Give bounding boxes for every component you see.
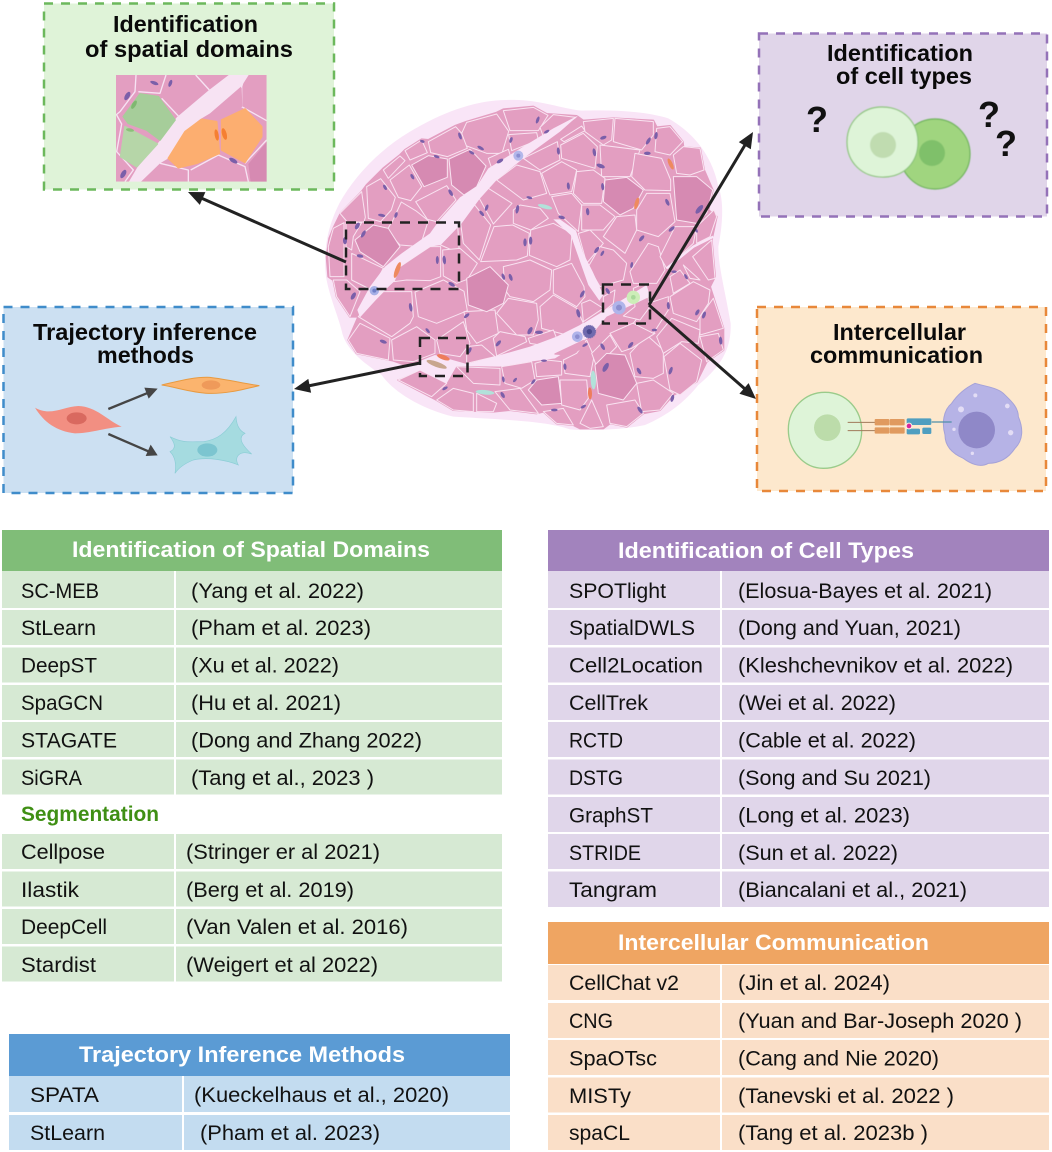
- row: DeepCell: DeepCell: [21, 916, 107, 939]
- row: Tangram: [548, 872, 1049, 907]
- row: DeepST: DeepST: [21, 654, 97, 678]
- row: StLearn: StLearn: [21, 617, 96, 640]
- table header: spatial domains: [2, 530, 502, 571]
- row: Ilastik: [2, 872, 502, 906]
- row: CellChat v2: [548, 965, 1049, 1000]
- row: STAGATE: STAGATE: [21, 730, 117, 752]
- row: SiGRA: [2, 760, 502, 794]
- row: Cell2Location: [548, 648, 1049, 682]
- row: SiGRA: (Tang et al., 2023 ): [191, 767, 374, 790]
- icon: question marks: ?: [978, 94, 1000, 135]
- heading: cell types: Identification: [827, 40, 973, 66]
- row: SPATA: (Kueckelhaus et al., 2020): [194, 1084, 449, 1107]
- row: Cellpose: [2, 834, 502, 869]
- row: Cell2Location: Cell2Location: [569, 654, 703, 678]
- row: MISTy: (Tanevski et al. 2022 ): [738, 1085, 954, 1108]
- pale connective tissue channels: [357, 115, 713, 383]
- table header: cell types: [548, 530, 1049, 571]
- table: identification of spatial domains: [2, 530, 502, 982]
- row: CNG: (Yuan and Bar-Joseph 2020 ): [738, 1010, 1022, 1033]
- row: spaCL: spaCL: [569, 1122, 630, 1145]
- icon: question marks: ?: [995, 123, 1017, 164]
- row: StLearn: [2, 610, 502, 645]
- row: SPOTlight: (Elosua-Bayes et al. 2021): [738, 580, 992, 603]
- row: SPOTlight: [548, 571, 1049, 608]
- row: SpaOTsc: (Cang and Nie 2020): [738, 1048, 939, 1070]
- table header: cell types: Identification of Cell Types: [618, 538, 914, 563]
- row: STAGATE: (Dong and Zhang 2022): [191, 730, 422, 752]
- row: DeepCell: [2, 909, 502, 944]
- row: CNG: [548, 1003, 1049, 1038]
- row: CellChat v2: CellChat v2: [569, 972, 679, 995]
- row: STAGATE: [2, 722, 502, 757]
- table header: intercellular communication: [548, 922, 1049, 964]
- row: SC-MEB: SC-MEB: [21, 580, 99, 603]
- arrow to spatial domains panel: [188, 192, 346, 262]
- table header: spatial domains: Identification of Spatial Domains: [72, 537, 430, 562]
- row: SPOTlight: SPOTlight: [569, 580, 666, 603]
- dashed zoom box: cell types region: [603, 284, 650, 324]
- cell nuclei: [343, 116, 723, 414]
- arrow to intercellular communication panel: [649, 305, 756, 399]
- immune and stromal cells in tissue: [370, 151, 675, 399]
- row: SpatialDWLS: [548, 610, 1049, 645]
- heading: spatial domains: of spatial domains: [85, 36, 293, 62]
- heading: trajectory inference: Trajectory inference: [33, 319, 257, 345]
- row: spaCL: (Tang et al. 2023b ): [738, 1122, 928, 1145]
- row: SpaOTsc: SpaOTsc: [569, 1048, 657, 1070]
- subheading: segmentation: Segmentation: [21, 803, 159, 826]
- icon: two green cells: [847, 107, 970, 189]
- table: trajectory inference methods: [9, 1034, 510, 1150]
- row: Stardist: Stardist: [21, 954, 96, 977]
- row: DSTG: DSTG: [569, 767, 623, 790]
- icon: question marks: ?: [806, 99, 828, 140]
- heading: intercellular communication: Intercellular: [833, 319, 966, 345]
- arrow to cell types panel: [649, 132, 753, 305]
- central tissue cross-section: [325, 100, 731, 430]
- row: Cellpose: Cellpose: [21, 841, 105, 864]
- row: SPATA: SPATA: [30, 1084, 99, 1107]
- icon: ligand receptor interaction between cells: [788, 383, 1022, 468]
- row: SpaGCN: (Hu et al. 2021): [191, 692, 341, 715]
- panel: identification of cell types: [759, 34, 1047, 216]
- row: StLearn: StLearn: [30, 1122, 105, 1145]
- row: Tangram: (Biancalani et al., 2021): [738, 879, 967, 902]
- panel: identification of spatial domains: [44, 4, 334, 190]
- row: GraphST: GraphST: [569, 804, 653, 828]
- row: SpaGCN: [2, 685, 502, 720]
- heading: intercellular communication: communication: [810, 342, 983, 368]
- row: Stardist: [2, 946, 502, 982]
- row: SC-MEB: [2, 571, 502, 608]
- table: identification of cell types: [548, 530, 1049, 907]
- row: Cell2Location: (Kleshchevnikov et al. 2022): [738, 654, 1013, 678]
- panel: intercellular communication: [757, 307, 1046, 491]
- row: DeepST: [2, 648, 502, 682]
- row: CellTrek: CellTrek: [569, 692, 649, 715]
- row: DSTG: (Song and Su 2021): [738, 767, 931, 790]
- row: RCTD: RCTD: [569, 730, 623, 752]
- icon: cell differentiation trajectories: [35, 377, 259, 473]
- row: RCTD: (Cable et al. 2022): [738, 730, 916, 752]
- row: Cellpose: (Stringer er al 2021): [186, 841, 380, 864]
- icon: question marks: [806, 94, 1017, 164]
- row: StLearn: (Pham et al. 2023): [191, 617, 371, 640]
- dashed zoom box: spatial domain region: [346, 222, 459, 289]
- heading: trajectory inference: methods: [97, 342, 194, 368]
- row: Stardist: (Weigert et al 2022): [186, 954, 378, 977]
- row: Ilastik: Ilastik: [21, 879, 80, 902]
- row: DSTG: [548, 760, 1049, 794]
- row: CellTrek: [548, 685, 1049, 720]
- row: SC-MEB: (Yang et al. 2022): [191, 580, 364, 603]
- row: SpaOTsc: [548, 1040, 1049, 1075]
- table: intercellular communication: [548, 922, 1049, 1150]
- row: MISTy: [548, 1078, 1049, 1112]
- table header: trajectory: [9, 1034, 510, 1076]
- panel: trajectory inference methods: [4, 307, 293, 493]
- heading: cell types: of cell types: [836, 63, 972, 89]
- arrow to trajectory panel: [294, 363, 420, 393]
- row: GraphST: (Long et al. 2023): [738, 804, 910, 828]
- row: STRIDE: [548, 834, 1049, 869]
- row: CNG: CNG: [569, 1010, 613, 1033]
- dashed zoom box: trajectory region: [420, 338, 468, 376]
- row: SpatialDWLS: (Dong and Yuan, 2021): [738, 617, 961, 640]
- row: spaCL: [548, 1115, 1049, 1150]
- row: SpatialDWLS: SpatialDWLS: [569, 617, 695, 640]
- row: GraphST: [548, 797, 1049, 832]
- row: STRIDE: (Sun et al. 2022): [738, 842, 898, 865]
- row: Tangram: Tangram: [569, 879, 657, 902]
- row: CellTrek: (Wei et al. 2022): [738, 692, 896, 715]
- row: DeepCell: (Van Valen et al. 2016): [186, 916, 408, 939]
- row: STRIDE: STRIDE: [569, 842, 641, 865]
- row: StLearn: (Pham et al. 2023): [200, 1122, 380, 1145]
- row: SiGRA: SiGRA: [21, 767, 82, 790]
- row: StLearn: [9, 1115, 510, 1150]
- table header: trajectory: Trajectory Inference Methods: [79, 1042, 405, 1067]
- row: MISTy: MISTy: [569, 1085, 632, 1108]
- heading: spatial domains: Identification: [113, 11, 258, 37]
- row: SpaGCN: SpaGCN: [21, 692, 103, 715]
- row: DeepST: (Xu et al. 2022): [191, 654, 339, 678]
- table header: intercellular communication: Intercellular Communication: [618, 930, 929, 955]
- row: CellChat v2: (Jin et al. 2024): [738, 972, 890, 995]
- row: RCTD: [548, 722, 1049, 757]
- row: Ilastik: (Berg et al. 2019): [186, 879, 354, 902]
- row: SPATA: [9, 1076, 510, 1112]
- tissue detail with coloured domains: [116, 74, 268, 183]
